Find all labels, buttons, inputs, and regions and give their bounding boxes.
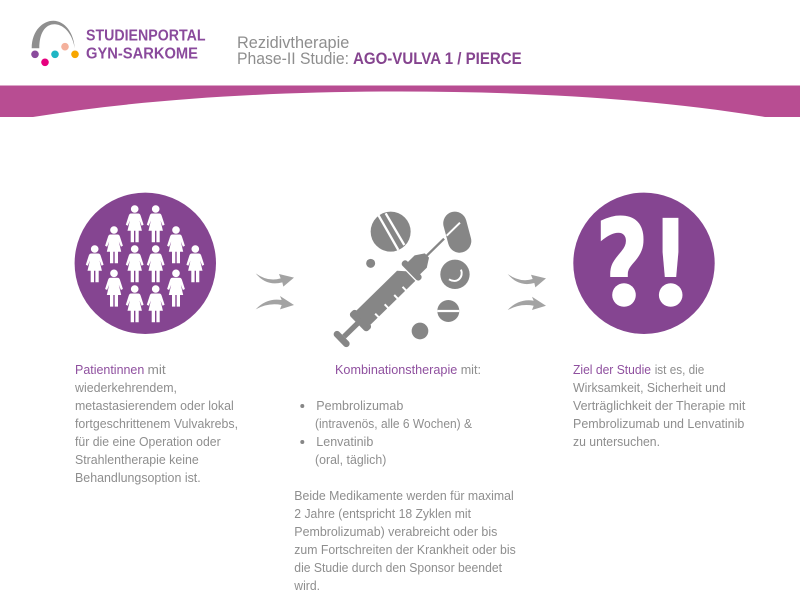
- logo: Studienportal GYN-Sarkome: [31, 21, 206, 66]
- text: study goal: Wirksamkeit, Sicherheit und: [573, 380, 726, 395]
- text: study goal: zu untersuchen.: [573, 434, 660, 449]
- round pill with hook: [440, 260, 470, 289]
- big pill: [371, 212, 411, 252]
- logo arc: [32, 21, 75, 48]
- text: duration: Pembrolizumab) verabreicht oder bis: [294, 524, 498, 539]
- dots: [366, 259, 428, 339]
- text: combination therapy: Lenvatinib: [316, 434, 373, 449]
- text: patients: wiederkehrendem,: [74, 380, 177, 395]
- icon: question and exclamation mark circle: !: [650, 194, 691, 336]
- logo wordmark: STUDIENPORTAL: [86, 28, 206, 45]
- header band: [0, 86, 800, 117]
- icon: question and exclamation mark circle: ?: [595, 194, 649, 336]
- text: study goal: Verträglichkeit der Therapie mit: [573, 398, 746, 413]
- arrows: patients to therapy: [256, 273, 294, 309]
- split tablet: [437, 300, 459, 322]
- text: duration: [293, 488, 516, 593]
- logo wordmark: GYN-SARKOME: [86, 45, 198, 62]
- text: combination therapy: [300, 362, 481, 467]
- syringe: [330, 230, 453, 350]
- text: patients: für die eine Operation oder: [75, 434, 221, 449]
- text: patients: Behandlungsoption ist.: [75, 470, 201, 485]
- title: Rezidivtherapie: [237, 33, 349, 52]
- text: patients: [74, 362, 238, 485]
- capsule: [441, 209, 474, 255]
- logo wordmark: [86, 28, 206, 62]
- text: duration: die Studie durch den Sponsor beendet: [294, 560, 502, 575]
- icon: patients circle: [75, 193, 216, 334]
- text: duration: wird.: [293, 578, 320, 593]
- text: patients: mit: [148, 362, 166, 377]
- text: study goal: [573, 362, 746, 449]
- text: patients: fortgeschrittenem Vulvakrebs,: [75, 416, 238, 431]
- text: duration: zum Fortschreiten der Krankheit oder bis: [294, 542, 516, 557]
- text: study goal: Ziel der Studie: [573, 362, 651, 377]
- text: study goal: Pembrolizumab und Lenvatinib: [573, 416, 744, 431]
- text: duration: 2 Jahre (entspricht 18 Zyklen mit: [294, 506, 471, 521]
- text: study goal: ist es, die: [655, 362, 704, 377]
- text: combination therapy: mit:: [461, 362, 481, 377]
- text: patients: metastasierendem oder lokal: [75, 398, 234, 413]
- text: patients: Strahlentherapie keine: [75, 452, 199, 467]
- text: duration: Beide Medikamente werden für maximal: [294, 488, 514, 503]
- text: combination therapy: Kombinationstherapie: [335, 362, 457, 377]
- text: combination therapy: (intravenös, alle 6 Wochen) &: [315, 416, 472, 431]
- text: patients: Patientinnen: [75, 362, 144, 377]
- text: combination therapy: Pembrolizumab: [316, 398, 403, 413]
- icon: syringe and pills: [330, 209, 474, 350]
- title: Phase-II Studie:: [237, 49, 349, 68]
- title: [237, 33, 522, 68]
- arrows: therapy to goal: [508, 274, 546, 310]
- text: combination therapy: (oral, täglich): [315, 452, 386, 467]
- title: AGO-VULVA 1 / PIERCE: [353, 49, 522, 68]
- logo dots: [31, 43, 79, 66]
- icon: question and exclamation mark circle: [573, 193, 715, 336]
